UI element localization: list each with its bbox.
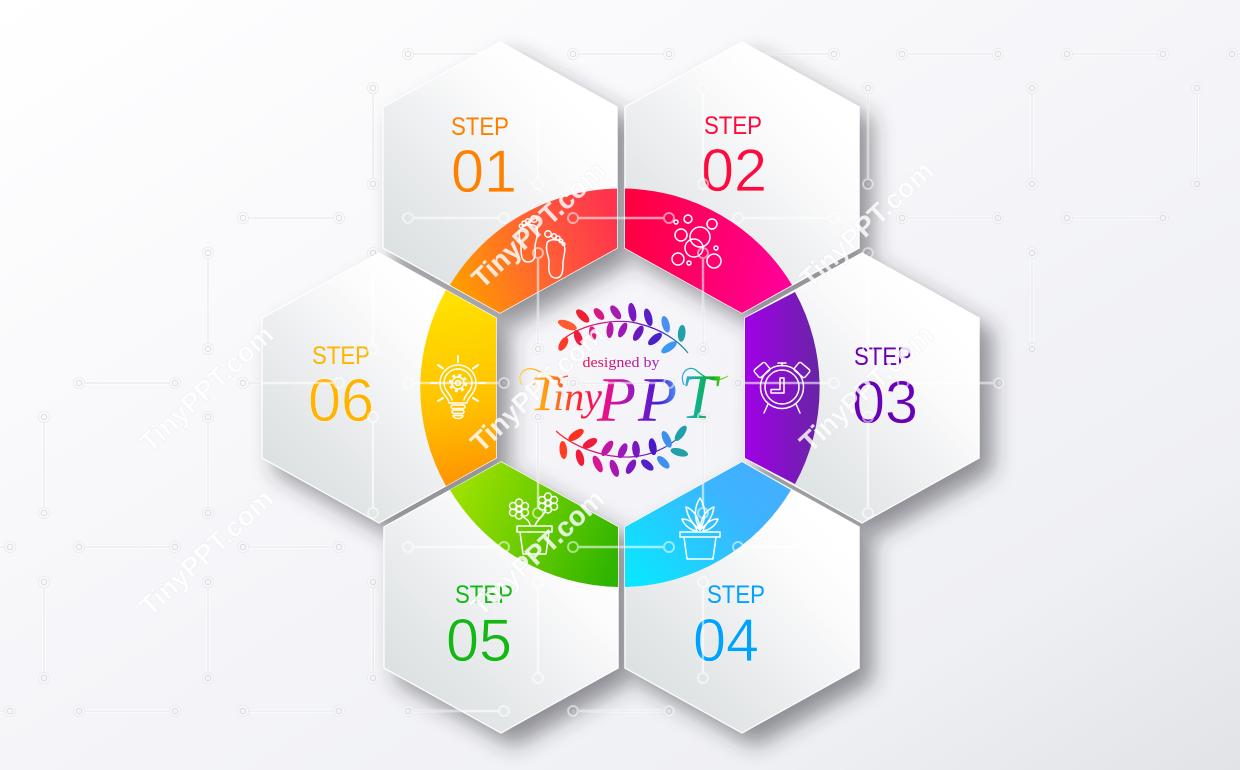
icon: alarm clock bbox=[753, 362, 811, 413]
watermarks: TinyPPT.com bbox=[793, 155, 939, 294]
logo: TinyPPT wordmark: T bbox=[681, 361, 721, 432]
watermarks: TinyPPT.com bbox=[465, 155, 611, 294]
step 04 label bbox=[693, 581, 765, 674]
step 03 label: STEP bbox=[854, 343, 912, 371]
ring segment step 03 bbox=[745, 292, 820, 484]
icon: footprints bbox=[519, 216, 565, 278]
logo: designed by: designed by bbox=[582, 355, 660, 371]
logo: TinyPPT wordmark: T bbox=[530, 365, 561, 421]
step 05 label: STEP bbox=[455, 581, 513, 609]
watermarks bbox=[133, 155, 939, 622]
ring segment step 06 bbox=[420, 290, 496, 486]
panel: hexagon step 06 bbox=[262, 253, 496, 523]
step 01 label: 01 bbox=[451, 138, 517, 205]
logo: TinyPPT wordmark: iny bbox=[553, 374, 602, 419]
panel: hexagon step 01 bbox=[383, 42, 617, 313]
step 03 label: 03 bbox=[852, 369, 918, 436]
icon: flower pot bbox=[510, 493, 558, 554]
watermarks: TinyPPT.com bbox=[133, 319, 279, 458]
panel: hexagon step 02 bbox=[625, 42, 859, 313]
logo: TinyPPT wordmark: P bbox=[637, 364, 677, 435]
panel: hexagon step 03 bbox=[745, 253, 979, 523]
ring segment step 01 bbox=[450, 188, 617, 313]
logo: bottom laurel wreath bbox=[556, 424, 689, 478]
hexagon panels bbox=[262, 42, 979, 733]
logo: top laurel wreath bbox=[556, 302, 688, 356]
step 01 label: STEP bbox=[451, 113, 509, 141]
step 04 label: 04 bbox=[693, 607, 759, 674]
step 05 label: 05 bbox=[446, 607, 512, 674]
ring segment step 04 bbox=[625, 462, 791, 587]
watermarks: TinyPPT.com bbox=[793, 319, 939, 458]
watermarks: TinyPPT.com bbox=[133, 483, 279, 622]
panel: hexagon step 04 bbox=[625, 462, 859, 733]
panel: hexagon step 05 bbox=[384, 462, 618, 733]
watermarks: TinyPPT.com bbox=[464, 319, 610, 458]
step 02 label: STEP bbox=[704, 112, 762, 140]
logo: TinyPPT wordmark bbox=[520, 361, 728, 435]
icon: light bulb with gear bbox=[431, 356, 485, 418]
step 06 label: 06 bbox=[308, 367, 374, 434]
step 02 label: 02 bbox=[701, 137, 767, 204]
ring segment step 05 bbox=[450, 462, 618, 587]
icon: succulent in pot bbox=[680, 498, 720, 559]
icon: bubbles bbox=[672, 215, 721, 268]
step 06 label: STEP bbox=[312, 342, 370, 370]
step 04 label: STEP bbox=[707, 581, 765, 609]
watermarks: TinyPPT.com bbox=[464, 483, 610, 622]
center logo bbox=[520, 302, 728, 478]
logo: TinyPPT wordmark: P bbox=[596, 364, 636, 435]
ring segment step 02 bbox=[625, 188, 792, 313]
